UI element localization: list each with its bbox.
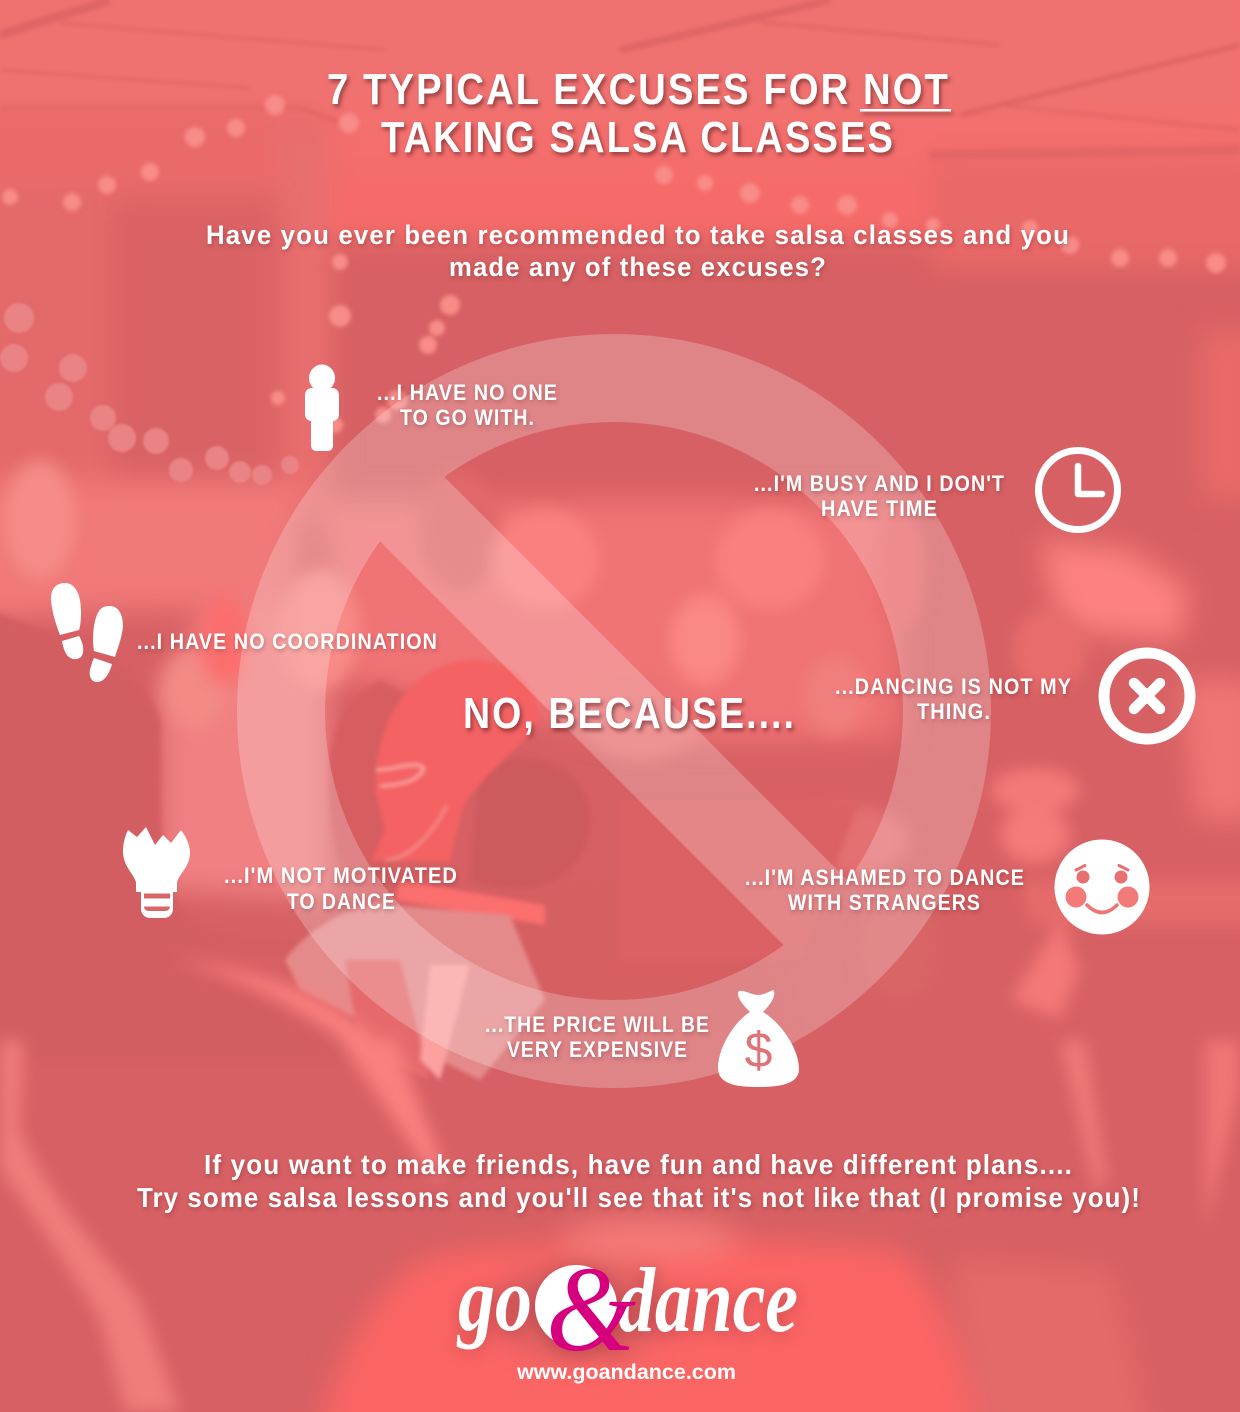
logo: go & dance: dance [618, 1249, 798, 1351]
icon: broken light bulb [123, 827, 190, 918]
excuse: no one to go with: TO GO WITH. [400, 405, 535, 430]
excuse: no one to go with: ...I HAVE NO ONE [377, 380, 558, 405]
string lights [2, 95, 1226, 433]
intro question: Have you ever been recommended to take salsa classes and you [206, 220, 1070, 250]
intro question: made any of these excuses? [449, 252, 827, 282]
website url: www.goandance.com [516, 1361, 736, 1384]
icon: blushing face [1054, 840, 1150, 934]
title: TAKING SALSA CLASSES [381, 113, 895, 162]
hanging globe lights [0, 303, 299, 485]
red shirt at bottom [316, 1218, 1150, 1412]
excuse: ashamed: ...I'M ASHAMED TO DANCE [745, 865, 1025, 890]
intro question [206, 220, 1070, 282]
title [327, 65, 951, 162]
logo: go & dance: & [546, 1242, 636, 1377]
prohibition sign [281, 378, 947, 1044]
excuse: ashamed: WITH STRANGERS [788, 890, 981, 915]
ceiling beams [0, 0, 1240, 155]
closing message: If you want to make friends, have fun and have different plans.... [204, 1149, 1073, 1180]
icon: person [305, 364, 339, 451]
excuse: not my thing: ...DANCING IS NOT MY [835, 674, 1072, 699]
excuse: busy: ...I'M BUSY AND I DON'T [754, 471, 1005, 496]
logo: go & dance: go [456, 1248, 532, 1350]
excuse: not motivated: TO DANCE [287, 889, 396, 914]
light sashes and shoulders [0, 960, 1240, 1412]
excuse: not motivated [224, 863, 458, 914]
excuse: expensive: VERY EXPENSIVE [507, 1037, 688, 1062]
excuse: busy: HAVE TIME [821, 496, 938, 521]
excuse: not my thing [835, 674, 1072, 724]
excuse: not my thing: THING. [917, 699, 991, 724]
excuse: no one to go with [377, 380, 558, 430]
title: 7 TYPICAL EXCUSES FOR NOT [327, 65, 950, 114]
excuse: not motivated: ...I'M NOT MOTIVATED [224, 863, 458, 888]
icon: x in circle [1104, 653, 1190, 739]
icon: money bag: $ [745, 1022, 772, 1078]
dark heads [0, 610, 860, 1060]
cap and jacket [285, 660, 545, 1080]
excuse: busy [754, 471, 1005, 521]
excuse: expensive: ...THE PRICE WILL BE [485, 1012, 710, 1037]
closing message: Try some salsa lessons and you'll see that it's not like that (I promise you)! [137, 1182, 1141, 1213]
excuse: expensive [485, 1012, 710, 1062]
logo: go & dance [456, 1242, 798, 1377]
center statement: NO, BECAUSE.... [463, 689, 796, 738]
crowd detail [4, 460, 1240, 1020]
icon: money bag [718, 990, 799, 1087]
excuse: ashamed [745, 865, 1025, 915]
closing message [137, 1149, 1141, 1213]
excuse: no coordination: ...I HAVE NO COORDINATION [137, 629, 438, 654]
icon: clock [1038, 450, 1118, 530]
icon: footprints [51, 583, 123, 682]
